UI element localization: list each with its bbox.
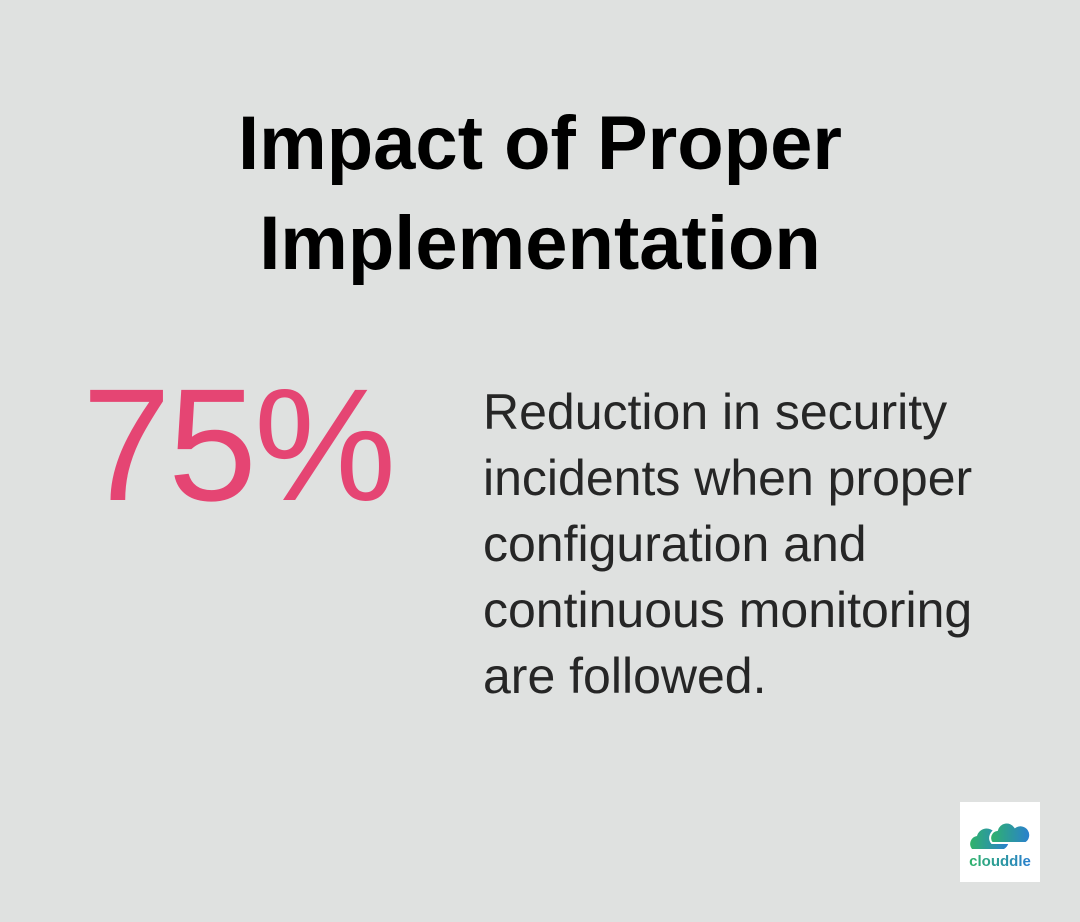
description text — [483, 384, 972, 704]
title: Impact of Proper — [238, 101, 842, 186]
stat: 75%: 75% — [82, 355, 393, 534]
logo: clouddle — [960, 802, 1040, 882]
description text: incidents when proper — [483, 450, 972, 506]
description text: Reduction in security — [483, 384, 947, 440]
title: Implementation — [259, 201, 821, 286]
logo: clouddle: clouddle — [969, 853, 1031, 870]
description text: continuous monitoring — [483, 582, 972, 638]
title — [238, 101, 842, 286]
description text: configuration and — [483, 516, 867, 572]
description text: are followed. — [483, 648, 766, 704]
